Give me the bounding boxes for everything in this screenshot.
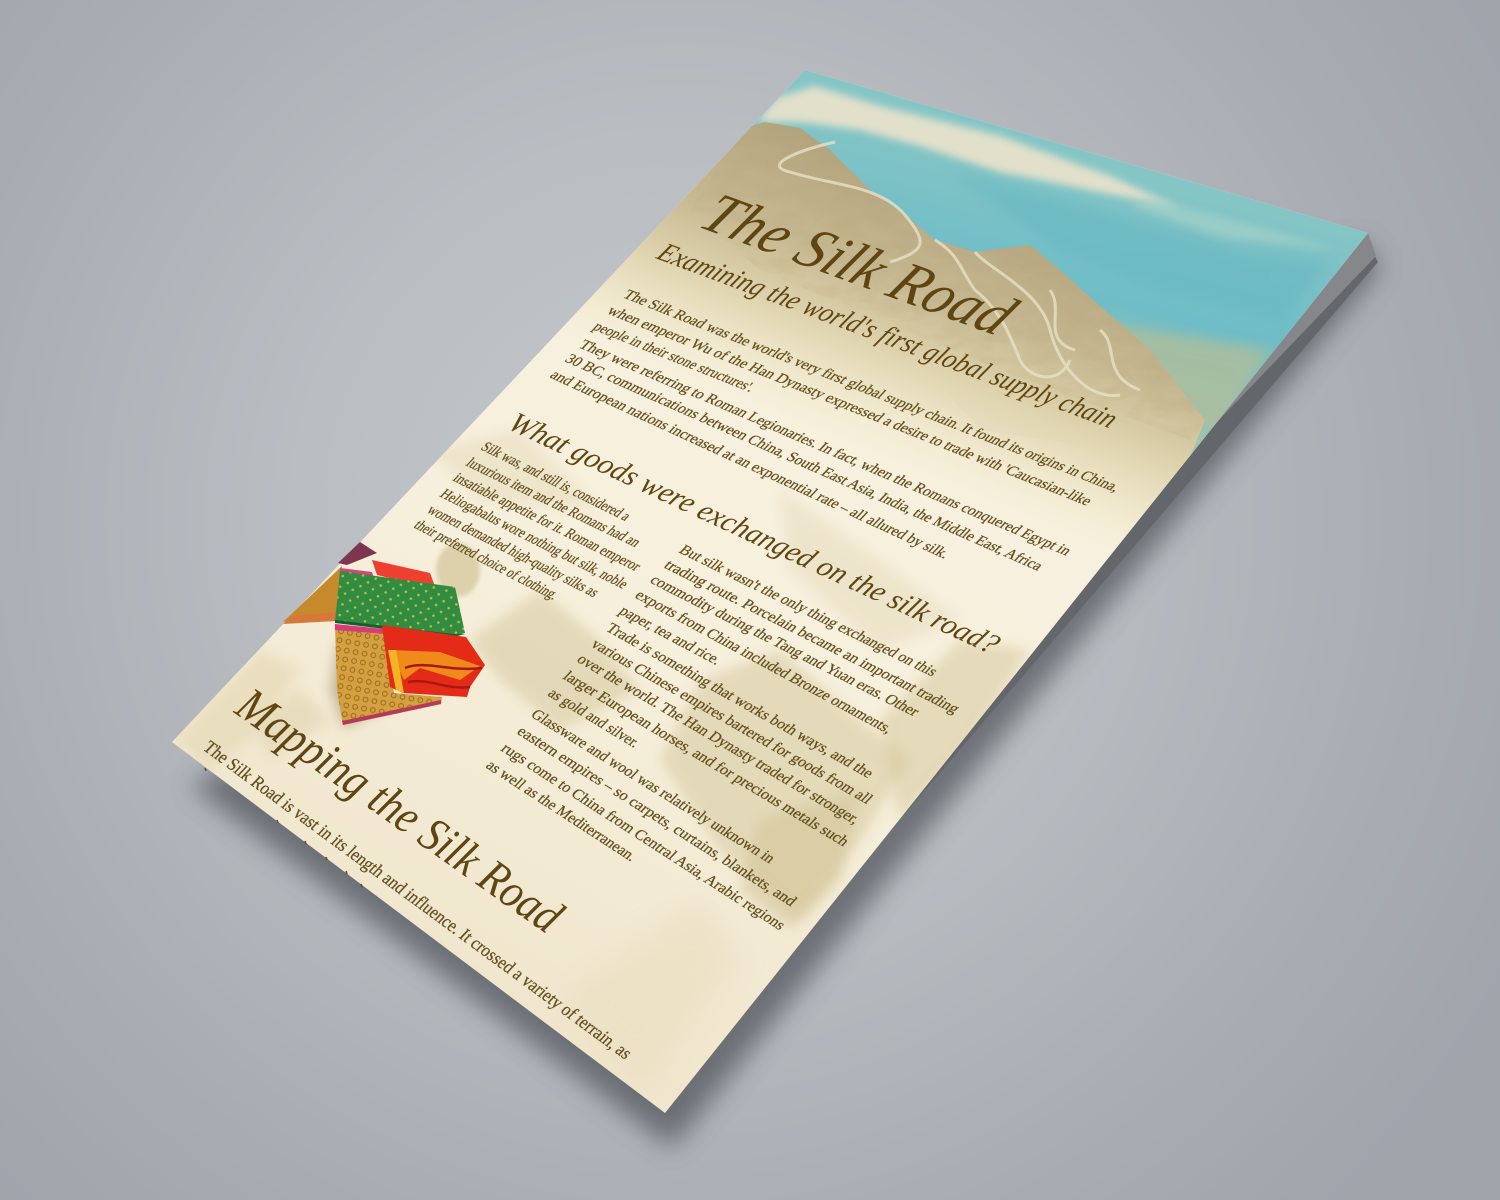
- photo: mountain landscape header: [580, 70, 1368, 552]
- text block: trade column: paper, tea and rice.: [615, 604, 725, 668]
- text block: trade column: trading route. Porcelain became an important trading: [660, 558, 963, 717]
- text block: trade column: commodity during the Tang and Yuan eras. Other: [646, 573, 923, 720]
- text block: trade column: as well as the Mediterranean.: [482, 758, 640, 865]
- text block: trade column: Trade is something that works both ways, and the: [602, 621, 877, 781]
- heading: what goods were exchanged: What goods were exchanged on the silk road?: [502, 407, 1007, 660]
- text block: silk column: Heliogabalus wore nothing but silk, noble: [436, 487, 632, 592]
- text block: silk column: their preferred choice of clothing.: [410, 518, 562, 603]
- text block: trade column: exports from China included Bronze ornaments,: [631, 588, 896, 737]
- text block: introduction: The Silk Road was the world's very first global supply chain. It found its origins in China,: [619, 288, 1124, 495]
- text block: mapping intro: The Silk Road is vast in its length and influence. It crossed a variety of terrain, as: [199, 737, 636, 1063]
- text block: silk column: [410, 440, 645, 603]
- text block: trade column: larger European horses, and for precious metals such: [559, 669, 852, 850]
- text block: introduction: people in their stone structures'.: [589, 320, 759, 395]
- text block: trade column: eastern empires – so carpets, curtains, blankets, and: [513, 724, 800, 909]
- text block: silk column: women demanded high-quality silks as: [423, 503, 602, 600]
- heading: mapping the silk road: Mapping the Silk Road: [226, 677, 573, 943]
- clipped tops of the next text line along the bottom edge: [205, 768, 362, 887]
- text block: silk column: luxurious item and the Romans had an: [462, 456, 644, 550]
- text block: trade column: But silk wasn't the only thing exchanged on this: [675, 543, 941, 679]
- image: pile of silk fabrics: [283, 542, 485, 728]
- text block: silk column: Silk was, and still is, considered a: [477, 440, 634, 524]
- text block: introduction: when emperor Wu of the Han Dynasty expressed a desire to trade with 'Caucasian-like: [603, 304, 1096, 509]
- subtitle: Examining the world's first global supply chain: [650, 238, 1124, 434]
- paper drop shadow: [190, 233, 1380, 1148]
- text block: introduction: and European nations increased at an exponential rate – all allured by silk.: [546, 368, 953, 562]
- text block: introduction: They were referring to Roman Legionaries. In fact, when the Romans conquered Egypt in: [575, 338, 1075, 559]
- title: The Silk Road: [688, 182, 1030, 347]
- background: faded engraving patches: [175, 430, 1030, 1090]
- text block: trade column: various Chinese empires bartered for goods from all: [587, 637, 876, 807]
- text block: introduction: 30 BC, communications between China, South East Asia, India, the Middle East, Africa: [561, 352, 1046, 574]
- text block: silk column: insatiable appetite for it. Roman emperor: [449, 471, 645, 574]
- panel: paper sheet: [172, 40, 1380, 1113]
- text block: trade column: over the world. The Han Dynasty traded for stronger,: [573, 652, 863, 827]
- text block: trade column: [482, 543, 963, 933]
- text block: trade column: rugs come to China from Central Asia, Arabic regions: [497, 741, 789, 933]
- text block: trade column: Glassware and wool was relatively unknown in: [527, 707, 778, 866]
- text block: trade column: as gold and silver.: [544, 686, 643, 751]
